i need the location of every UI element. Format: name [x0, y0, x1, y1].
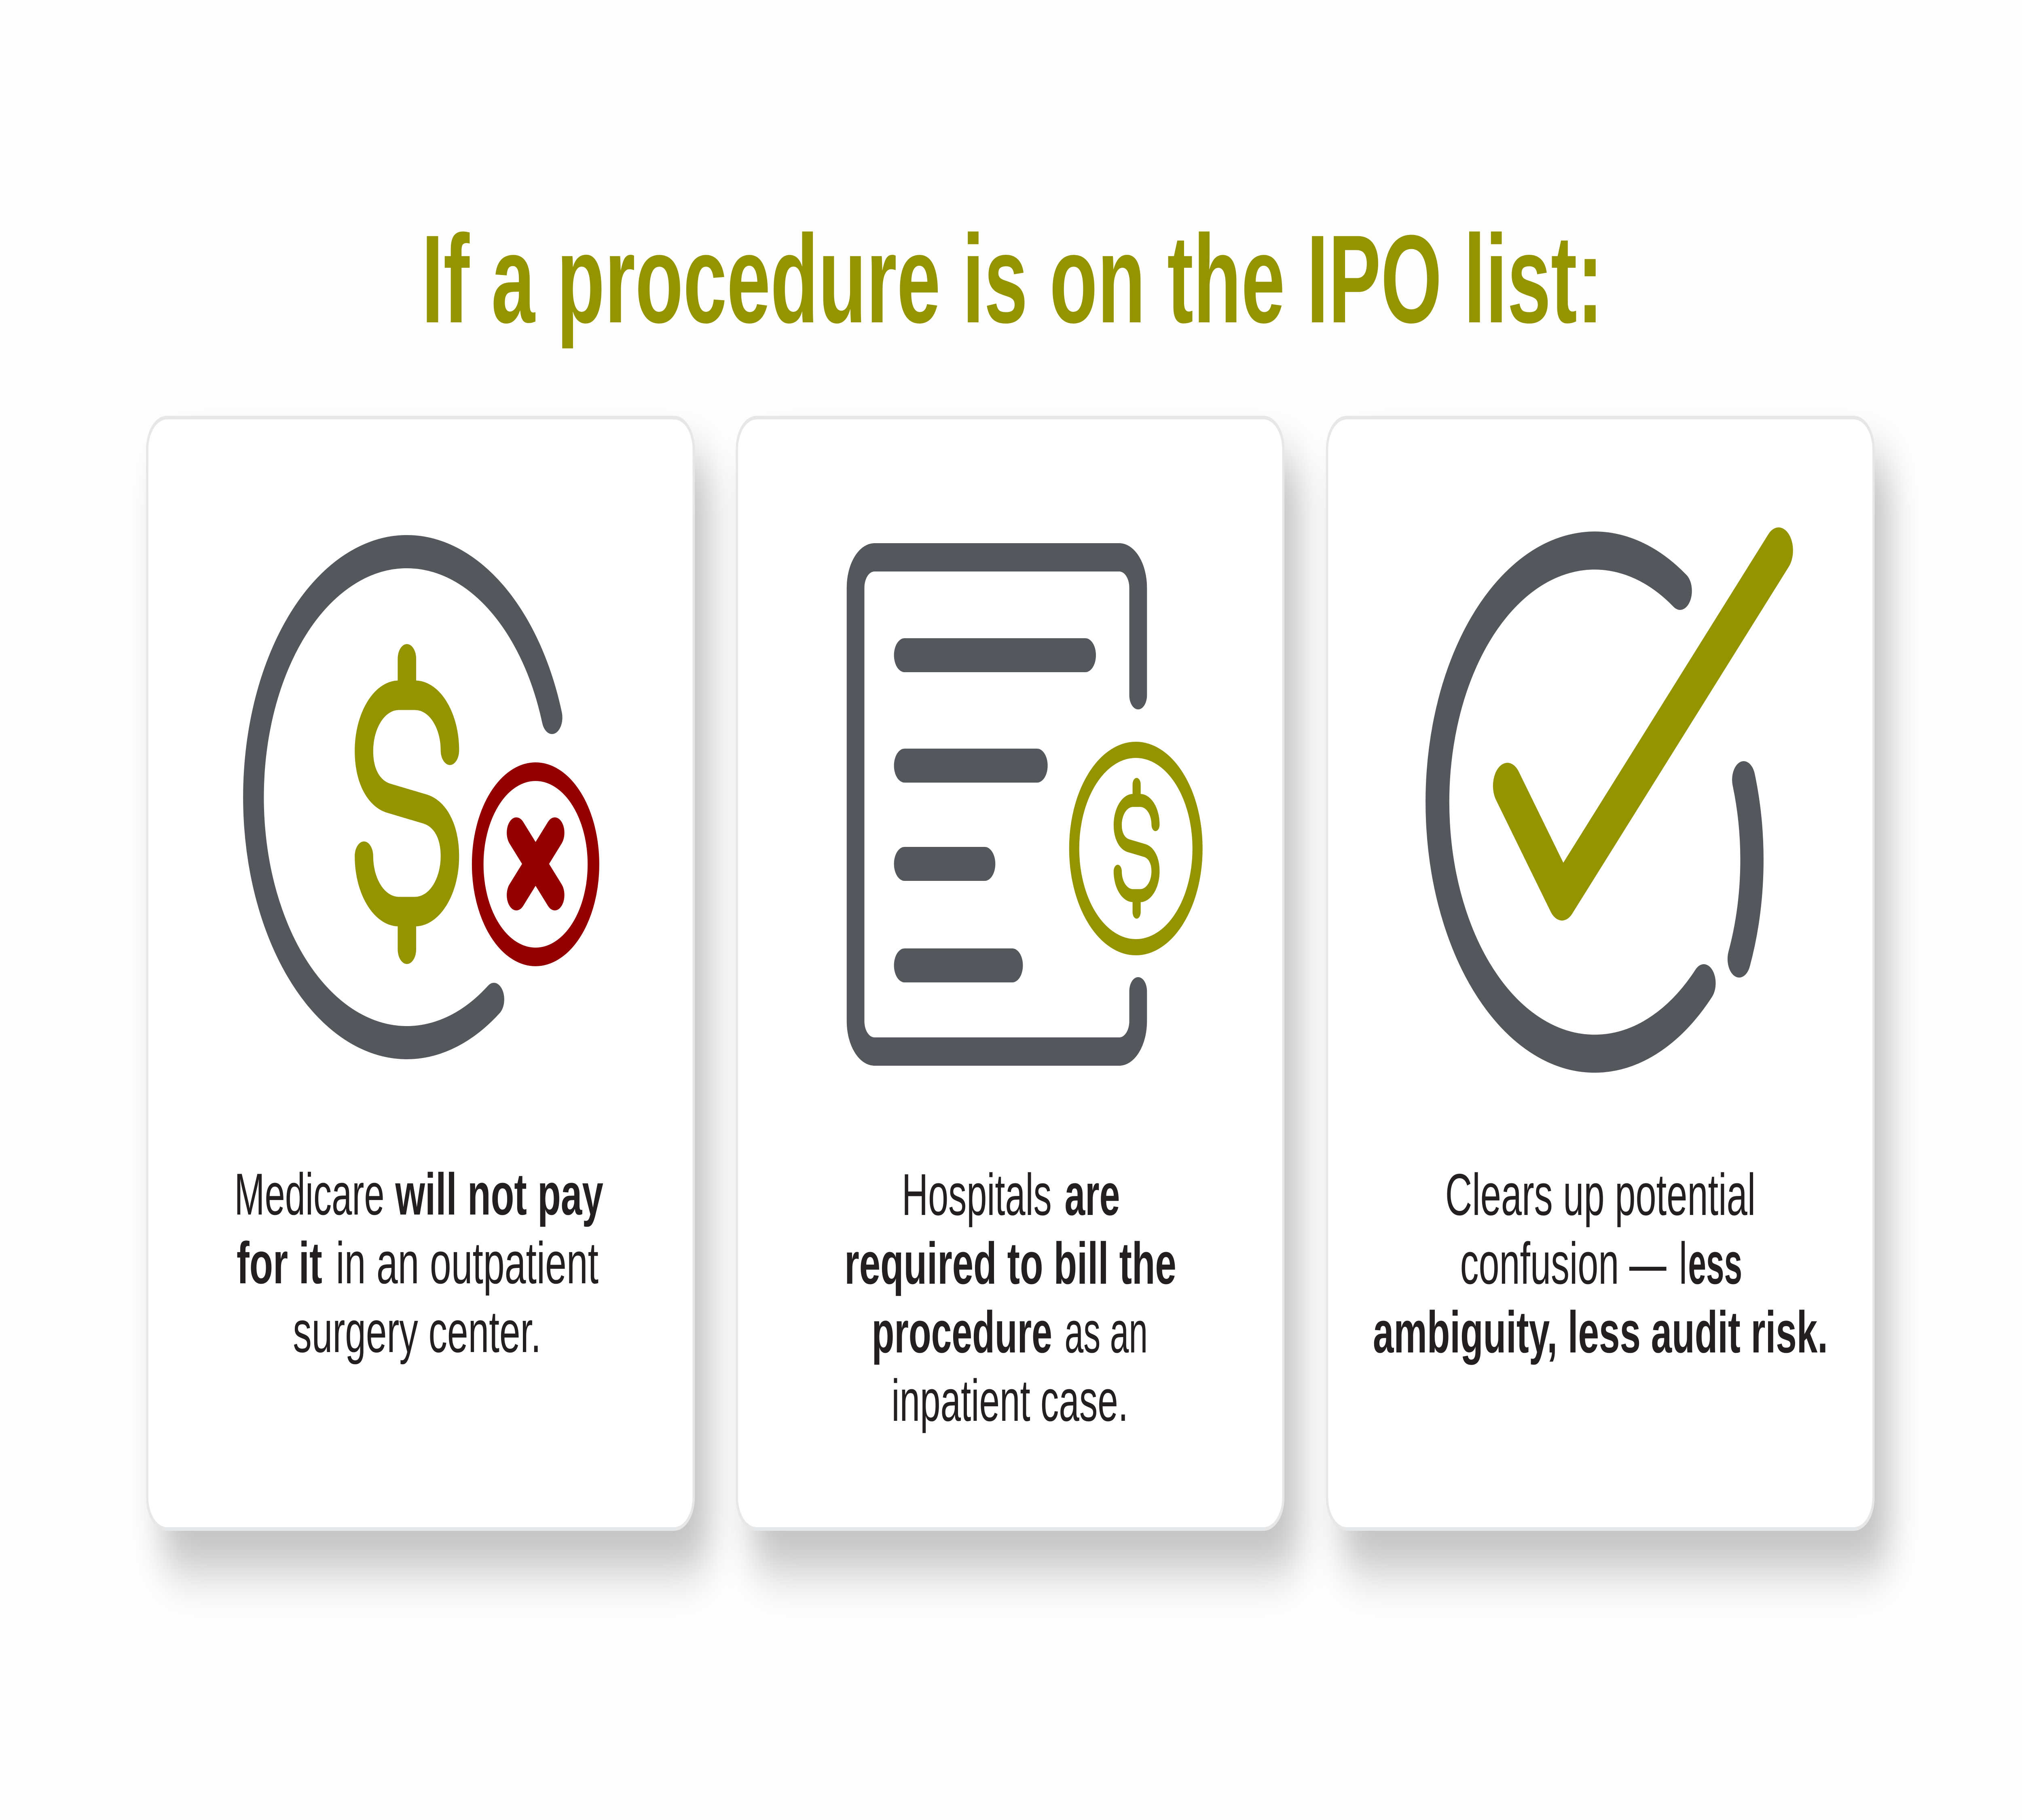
text: hospitals: as an [1064, 1299, 1148, 1365]
text: medicare: surgery center. [293, 1299, 541, 1365]
text: clears up: ess [1688, 1230, 1742, 1296]
icon: dollar with cross in open circle [254, 552, 594, 1043]
text: medicare: will not pay [395, 1161, 603, 1227]
dollar coin [1074, 750, 1197, 947]
icon: document with dollar coin [856, 557, 1197, 1052]
text: hospitals: Hospitals [902, 1162, 1052, 1227]
open circle arc [254, 552, 552, 1043]
red cross badge [478, 772, 594, 957]
text: hospitals [844, 1162, 1176, 1433]
text: hospitals: inpatient case. [891, 1367, 1128, 1433]
text: medicare: Medicare [234, 1161, 385, 1227]
text: clears up: l [1679, 1230, 1687, 1296]
document lines [905, 655, 1085, 965]
text: clears up: Clears up potential [1445, 1162, 1756, 1227]
panel: hospitals required to bill [737, 417, 1283, 1529]
text: hospitals: required to bill the [844, 1230, 1176, 1296]
panel: medicare will not pay [147, 417, 694, 1529]
icon: check mark in broken circle [1438, 550, 1779, 1054]
document outline [856, 557, 1138, 1052]
panel: clears up confusion [1327, 417, 1874, 1529]
broken circle arcs [1438, 550, 1704, 1054]
text: medicare: for it [237, 1230, 322, 1296]
text: clears up: ambiguity, less audit risk. [1373, 1299, 1828, 1365]
text: clears up [1373, 1162, 1828, 1365]
dollar sign [364, 659, 450, 949]
text: clears up: confusion — [1460, 1230, 1667, 1296]
text: medicare: in an outpatient [336, 1230, 599, 1296]
check mark [1508, 550, 1779, 897]
title: If a procedure is on the IPO list: [421, 209, 1603, 350]
text: hospitals: are [1064, 1162, 1120, 1227]
text: hospitals: procedure [872, 1299, 1052, 1365]
text: medicare [234, 1161, 603, 1365]
